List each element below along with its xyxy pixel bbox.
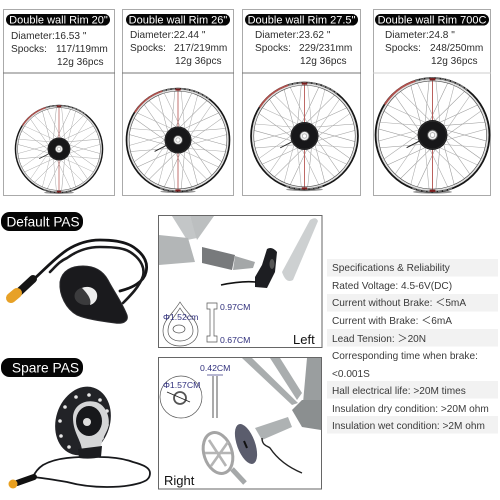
diagram: sensor dimensions: [163, 302, 217, 346]
heading: default PAS: Default PAS: [6, 214, 80, 230]
label: Left: Left: [293, 332, 315, 347]
text block: 20 inch specs: 12g 36pcs: [57, 57, 104, 68]
panel: specifications table: <0.001S: [332, 369, 370, 380]
text block: 26 inch specs: [130, 30, 227, 67]
icon: default PAS sensor: [11, 240, 147, 323]
panel: specifications table: Lead Tension: ＞20N: [332, 334, 426, 345]
panel: 26 inch wheel card: [122, 10, 234, 196]
illustration: bike frame and crank: [159, 216, 318, 281]
text block: 27.5 inch specs: Spocks:: [255, 43, 291, 54]
panel: specifications table: Current with Brake: ＜6mA: [332, 316, 452, 327]
panel: specifications table: Corresponding time when brake:: [332, 351, 478, 362]
text block: 27.5 inch specs: [255, 30, 352, 67]
heading: spare PAS: Spare PAS: [12, 360, 79, 376]
label: diameter 1.57CM: Φ1.57CM: [163, 380, 200, 390]
diagram: disc dimensions: [160, 375, 223, 418]
heading: rim 700C: Double wall Rim 700C: [378, 15, 486, 27]
label: diameter 1.52cm: Φ1.52cm: [163, 312, 198, 322]
icon: sensor on axle: [221, 248, 277, 288]
text block: 700C specs: 12g 36pcs: [431, 56, 478, 67]
panel: right mounting diagram: [158, 358, 322, 489]
panel: specifications table: Hall electrical life: >20M times: [332, 386, 466, 397]
heading: rim 20: Double wall Rim 20": [9, 15, 108, 27]
text block: 20 inch specs: [11, 31, 108, 68]
icon: 26 inch wheel: [127, 89, 229, 193]
panel: 27.5 inch wheel card: [242, 10, 361, 196]
text block: 700C specs: [385, 30, 483, 67]
panel: specifications table: Insulation dry condition: >20M ohm: [332, 404, 489, 415]
heading: spare PAS: [1, 358, 83, 377]
text block: 20 inch specs: Diameter:16.53 ": [11, 31, 87, 42]
label: 0.67CM: 0.67CM: [220, 335, 250, 345]
text block: 700C specs: Spocks:: [385, 43, 421, 54]
panel: 20 inch wheel card: [3, 10, 115, 196]
text block: 27.5 inch specs: 12g 36pcs: [300, 56, 347, 67]
text block: 700C specs: 248/250mm: [430, 43, 483, 54]
icon: sensor disc and cable: [230, 421, 302, 473]
panel: specifications table: Specifications & Reliability: [332, 263, 451, 274]
panel: specifications table: [327, 259, 498, 434]
label: Right: Right: [164, 473, 195, 488]
panel: specifications table: Current without Brake: ＜5mA: [332, 298, 466, 309]
icon: spare PAS sensor: [8, 379, 150, 488]
icon: 20 inch wheel: [15, 105, 103, 194]
panel: specifications table: Insulation wet condition: >2M ohm: [332, 421, 485, 432]
icon: 700C wheel: [376, 78, 489, 194]
heading: rim 27.5: Double wall Rim 27.5": [248, 15, 356, 27]
label: 0.97CM: 0.97CM: [220, 302, 250, 312]
heading: rim 26: Double wall Rim 26": [129, 15, 227, 27]
text block: 26 inch specs: 12g 36pcs: [175, 56, 222, 67]
text block: 700C specs: Diameter:24.8 ": [385, 30, 455, 41]
text block: 27.5 inch specs: 229/231mm: [299, 43, 352, 54]
text block: 26 inch specs: 217/219mm: [174, 43, 227, 54]
text block: 20 inch specs: 117/119mm: [56, 44, 108, 55]
illustration: bike frame: [242, 358, 321, 440]
icon: 27.5 inch wheel: [251, 83, 358, 191]
panel: specifications table: Rated Voltage: 4.5-6V(DC): [332, 281, 452, 292]
text block: 26 inch specs: Diameter:22.44 ": [130, 30, 206, 41]
text block: 27.5 inch specs: Diameter:23.62 ": [255, 30, 331, 41]
illustration: chainring and crank: [198, 429, 245, 483]
panel: 700C wheel card: [373, 10, 491, 196]
panel: left mounting diagram: [158, 216, 322, 348]
text block: 26 inch specs: Spocks:: [130, 43, 166, 54]
text block: 20 inch specs: Spocks:: [11, 44, 47, 55]
label: 0.42CM: 0.42CM: [200, 363, 230, 373]
